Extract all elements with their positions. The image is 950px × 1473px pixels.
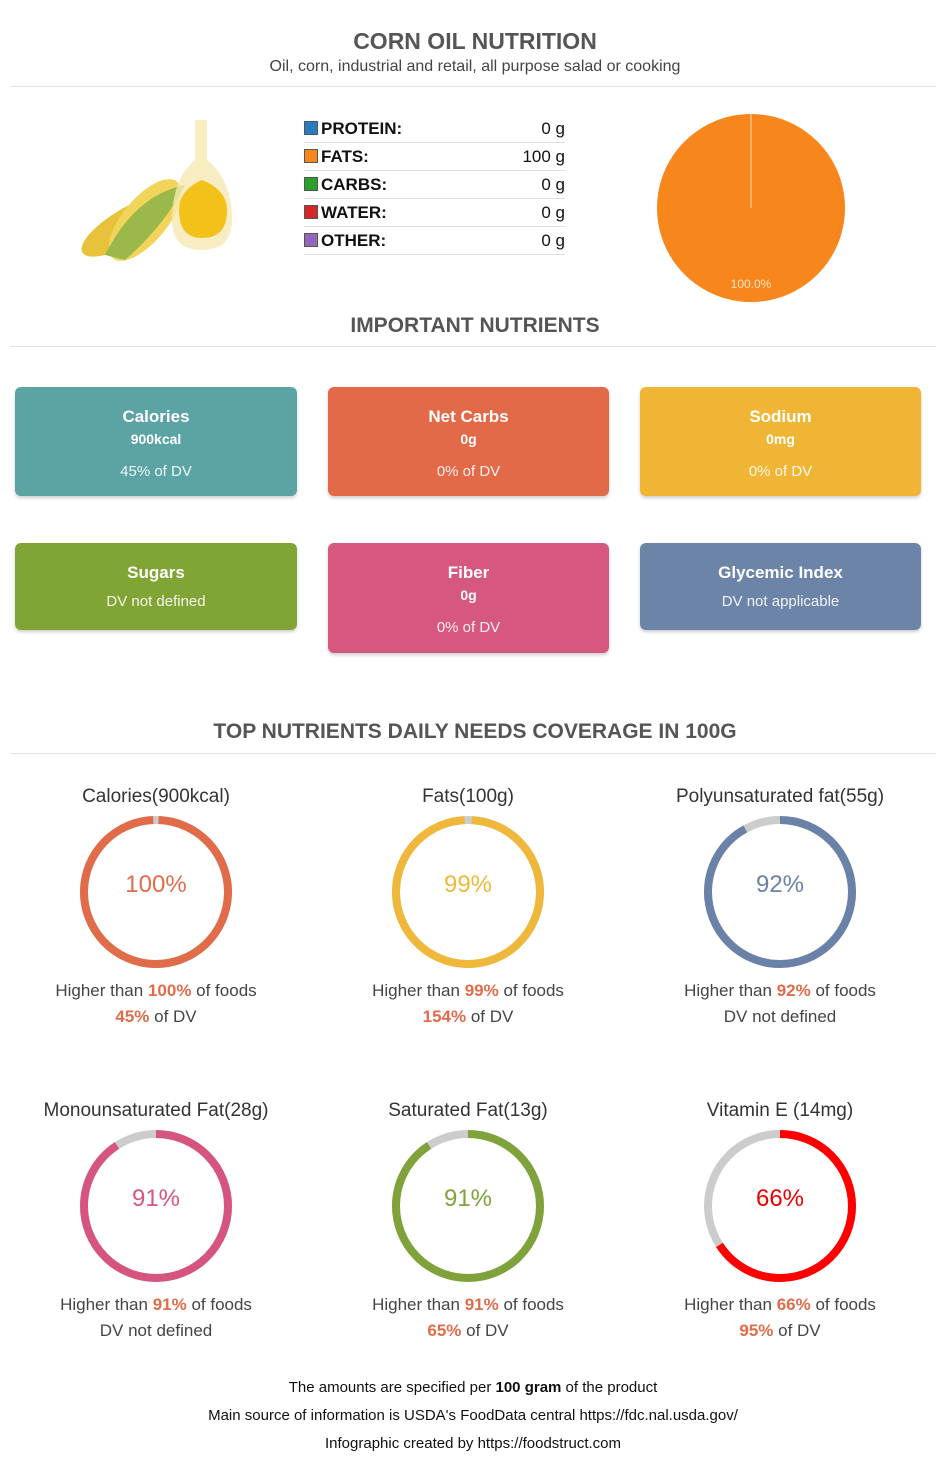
donut: vitamin E: Vitamin E (14mg) bbox=[707, 1100, 853, 1121]
text: OTHER: bbox=[321, 231, 386, 250]
card: sodium: 0% of DV bbox=[749, 463, 812, 480]
donut: calories: Higher than 100% of foods bbox=[55, 981, 257, 1000]
card: glycemic index: DV not applicable bbox=[722, 593, 839, 610]
card: sodium: Sodium bbox=[749, 407, 812, 426]
text: FATS: bbox=[321, 147, 369, 166]
text: 0 g bbox=[541, 231, 565, 250]
card: sugars: Sugars bbox=[127, 563, 185, 582]
donut: saturated fat: Saturated Fat(13g) bbox=[388, 1100, 548, 1121]
donut: calories: Calories(900kcal) bbox=[82, 786, 230, 807]
donut: calories bbox=[55, 786, 257, 1026]
card: fiber bbox=[328, 543, 609, 653]
donut: monounsaturated fat: DV not defined bbox=[100, 1321, 212, 1340]
donut: monounsaturated fat: 91% bbox=[132, 1185, 180, 1212]
card: net carbs: Net Carbs bbox=[428, 407, 509, 426]
text: 0 g bbox=[541, 175, 565, 194]
text: WATER: bbox=[321, 203, 387, 222]
donut: saturated fat: Higher than 91% of foods bbox=[372, 1295, 564, 1314]
card: fiber: Fiber bbox=[448, 563, 489, 582]
subtitle: Oil, corn, industrial and retail, all purpose salad or cooking bbox=[270, 58, 680, 75]
pie chart bbox=[657, 114, 845, 302]
card: sodium: 0mg bbox=[766, 431, 795, 447]
card: calories: Calories bbox=[122, 407, 190, 426]
donut: saturated fat: 65% of DV bbox=[427, 1321, 509, 1340]
donut: calories: 45% of DV bbox=[115, 1007, 197, 1026]
text: 0 g bbox=[541, 203, 565, 222]
icon: corn and oil bottle bbox=[82, 120, 232, 261]
donut: vitamin E: Higher than 66% of foods bbox=[684, 1295, 876, 1314]
donut: vitamin E bbox=[684, 1100, 876, 1340]
heading: top nutrients: TOP NUTRIENTS DAILY NEEDS COVERAGE IN 100G bbox=[213, 720, 737, 743]
card: glycemic index bbox=[640, 543, 921, 630]
card: calories bbox=[15, 387, 297, 496]
donut: polyunsaturated fat bbox=[676, 786, 884, 1026]
footer: Infographic created by https://foodstruct.com bbox=[325, 1435, 621, 1452]
heading: important nutrients: IMPORTANT NUTRIENTS bbox=[350, 314, 600, 337]
donut: saturated fat bbox=[372, 1100, 564, 1340]
donut: calories: 100% bbox=[125, 871, 187, 898]
donut: polyunsaturated fat: 92% bbox=[756, 871, 804, 898]
card: glycemic index: Glycemic Index bbox=[718, 563, 843, 582]
donut: monounsaturated fat: Monounsaturated Fat(28g) bbox=[44, 1100, 268, 1121]
card: calories: 900kcal bbox=[131, 431, 181, 447]
text: CARBS: bbox=[321, 175, 387, 194]
footer: The amounts are specified per 100 gram of the product bbox=[289, 1379, 657, 1396]
donut: polyunsaturated fat: DV not defined bbox=[724, 1007, 836, 1026]
donut: fats: Higher than 99% of foods bbox=[372, 981, 564, 1000]
macro table bbox=[304, 119, 565, 255]
card: sugars bbox=[15, 543, 297, 630]
pie chart: 100.0% bbox=[731, 277, 772, 291]
text: 100 g bbox=[522, 147, 565, 166]
donut: vitamin E: 95% of DV bbox=[739, 1321, 821, 1340]
title: CORN OIL NUTRITION bbox=[353, 28, 597, 54]
card: fiber: 0g bbox=[460, 587, 477, 603]
donut: monounsaturated fat: Higher than 91% of foods bbox=[60, 1295, 252, 1314]
footer bbox=[208, 1379, 738, 1452]
card: fiber: 0% of DV bbox=[437, 619, 500, 636]
donut: polyunsaturated fat: Polyunsaturated fat(55g) bbox=[676, 786, 884, 807]
card: sodium bbox=[640, 387, 921, 496]
donut: fats: Fats(100g) bbox=[422, 786, 514, 807]
footer: Main source of information is USDA's FoodData central https://fdc.nal.usda.gov/ bbox=[208, 1407, 738, 1424]
card: net carbs bbox=[328, 387, 609, 496]
card: calories: 45% of DV bbox=[120, 463, 192, 480]
donut: fats: 154% of DV bbox=[423, 1007, 513, 1026]
card: sugars: DV not defined bbox=[106, 593, 206, 610]
donut: saturated fat: 91% bbox=[444, 1185, 492, 1212]
donut: fats bbox=[372, 786, 564, 1026]
donut: vitamin E: 66% bbox=[756, 1185, 804, 1212]
card: net carbs: 0% of DV bbox=[437, 463, 500, 480]
donut: monounsaturated fat bbox=[44, 1100, 268, 1340]
donut: fats: 99% bbox=[444, 871, 492, 898]
text: PROTEIN: bbox=[321, 119, 402, 138]
card: net carbs: 0g bbox=[460, 431, 477, 447]
donut: polyunsaturated fat: Higher than 92% of foods bbox=[684, 981, 876, 1000]
text: 0 g bbox=[541, 119, 565, 138]
